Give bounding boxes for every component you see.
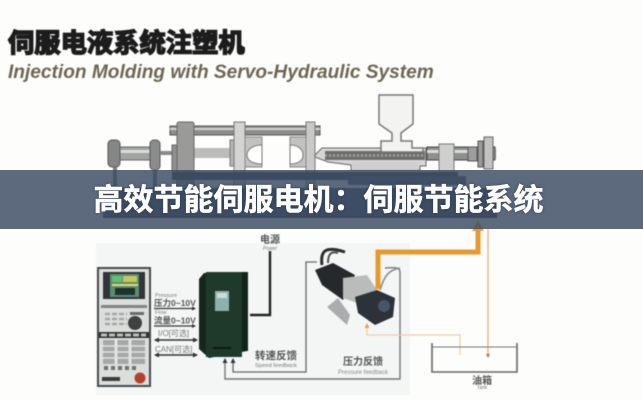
tank label [472,374,492,391]
signal labels and arrows: Flow [155,310,167,316]
servo drive [199,272,248,358]
speed feedback label: Speed feedback [255,363,297,369]
return line to tank [487,229,489,355]
banner title: 高效节能伺服电机：伺服节能系统 [94,184,544,217]
tank label: Tank [477,385,488,391]
pressure feedback line [225,268,400,379]
moving platen and tie bars [170,122,320,202]
tank label: 油箱 [472,374,492,387]
suction line [367,327,460,355]
oil tank [432,343,517,391]
signal labels and arrows: 流量0~10V [154,316,196,326]
label: power [260,233,280,252]
screen [103,272,145,299]
heading: Chinese title: 伺服电液系统注塑机 [8,28,245,58]
left linkage rods [108,140,177,200]
suction arrowhead [364,323,370,328]
return arrow tip [486,354,490,358]
machine rails seen through banner [103,172,497,218]
mold halves [245,137,306,167]
speed feedback label: 转速反馈 [255,349,297,362]
orange pressure pipe [378,228,478,289]
panel: background behind control diagram [96,243,410,395]
pressure feedback label [338,355,389,376]
label: power: 电源 [260,233,280,246]
speed feedback label [255,349,297,369]
power cable [250,251,270,315]
signal labels and arrows: 压力0~10V [154,298,196,308]
control panel [97,267,151,387]
signal labels and arrows: CAN[可选] [155,344,192,354]
keypad [99,305,149,381]
servo motor and pump [315,249,400,325]
signal labels and arrows: I/O[可选] [158,328,189,338]
hopper [379,95,423,152]
injection molding machine [103,95,497,218]
signal labels and arrows: Pressure [155,293,177,299]
signal labels and arrows [154,293,198,358]
label: power: Power [263,246,277,252]
heading: English title: Injection Molding with Servo-Hydraulic System [8,62,434,83]
rear cylinder and pistons [427,137,496,179]
drive display [215,291,229,311]
orange arrowhead [472,220,484,231]
pressure feedback label: 压力反馈 [343,355,383,368]
emergency stop [134,372,146,384]
feedback arrowheads [222,358,236,363]
banner strip [0,170,643,229]
injection barrel and screw [315,148,426,170]
pressure feedback label: Pressure feedback [338,370,389,376]
speed feedback line [233,262,317,372]
